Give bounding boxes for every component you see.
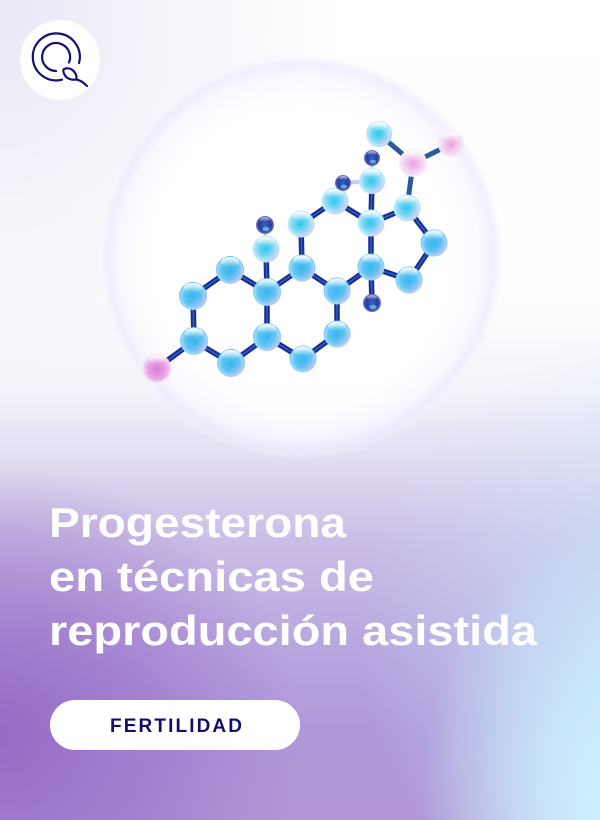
bubble sphere [100,56,502,458]
category pill: FERTILIDAD: FERTILIDAD [110,716,242,737]
atom: pink oxygen bottom left [143,354,171,382]
title: reproducción asistida [49,607,538,654]
molecule [143,121,464,382]
title [49,499,538,654]
atoms: ring B [288,210,350,372]
atoms: ring A [179,256,281,377]
atoms: pink side chain [399,131,464,177]
title: en técnicas de [49,553,374,600]
molecule bonds [157,134,451,368]
logo badge [20,20,100,100]
icon: Q rings with sperm [33,33,87,86]
atoms: rings C and D [322,121,448,312]
title: Progesterona [49,499,347,546]
category pill: FERTILIDAD [50,700,300,750]
atoms: methyl group [252,216,280,262]
